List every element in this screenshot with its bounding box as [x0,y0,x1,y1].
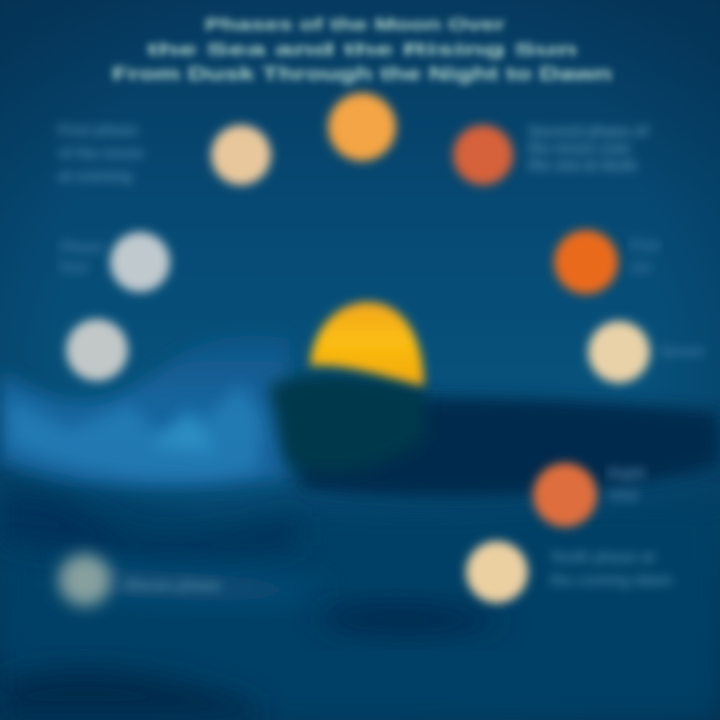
label: top left: of the moon [58,145,144,162]
title: the Sea and the Rising Sun [147,40,577,59]
title [112,15,612,84]
label: right [630,237,660,276]
label: bottom right lower: the coming dawn [550,572,673,589]
central sun [310,302,424,386]
label: left: Phase [60,239,104,256]
circle: lower left grey [66,319,128,381]
label: bottom right lower: Tenth phase at [550,549,655,566]
label: lower right: Seven [660,343,704,360]
label: left: four [60,259,89,276]
label: bottom right lower [550,549,673,589]
label: bottom right upper [608,465,646,504]
title: Phases of the Moon Over [205,15,506,34]
circle: bottom left faint [59,554,111,606]
circle: top right red-orange [453,125,513,185]
circle: top left cream [211,125,271,185]
label: left [60,239,104,276]
label: bottom right upper: Eight [608,465,646,482]
circle: top centre orange [328,93,396,161]
label: top right: the sea at dusk [528,157,637,174]
circle: left grey [110,232,170,292]
circle: lower right cream [588,321,650,383]
label: bottom right upper: nine [608,487,639,504]
label: top right [528,123,649,174]
label: top left: First phase [58,122,138,139]
dark island horizon [268,374,720,497]
label: bottom left: Eleven phase [125,577,221,594]
label: top left: at evening [58,168,132,185]
label: right: Five [630,237,660,254]
label: top left [58,122,144,185]
circle: bottom right orange [533,463,597,527]
ocean waves [0,336,720,720]
title: From Dusk Through the Night to Dawn [112,64,612,84]
circle: right orange [554,230,618,294]
label: top right: Second phase of [528,123,649,140]
circle: bottom right cream [466,541,528,603]
label: top right: the moon over [528,140,632,157]
label: right: six [630,259,652,276]
